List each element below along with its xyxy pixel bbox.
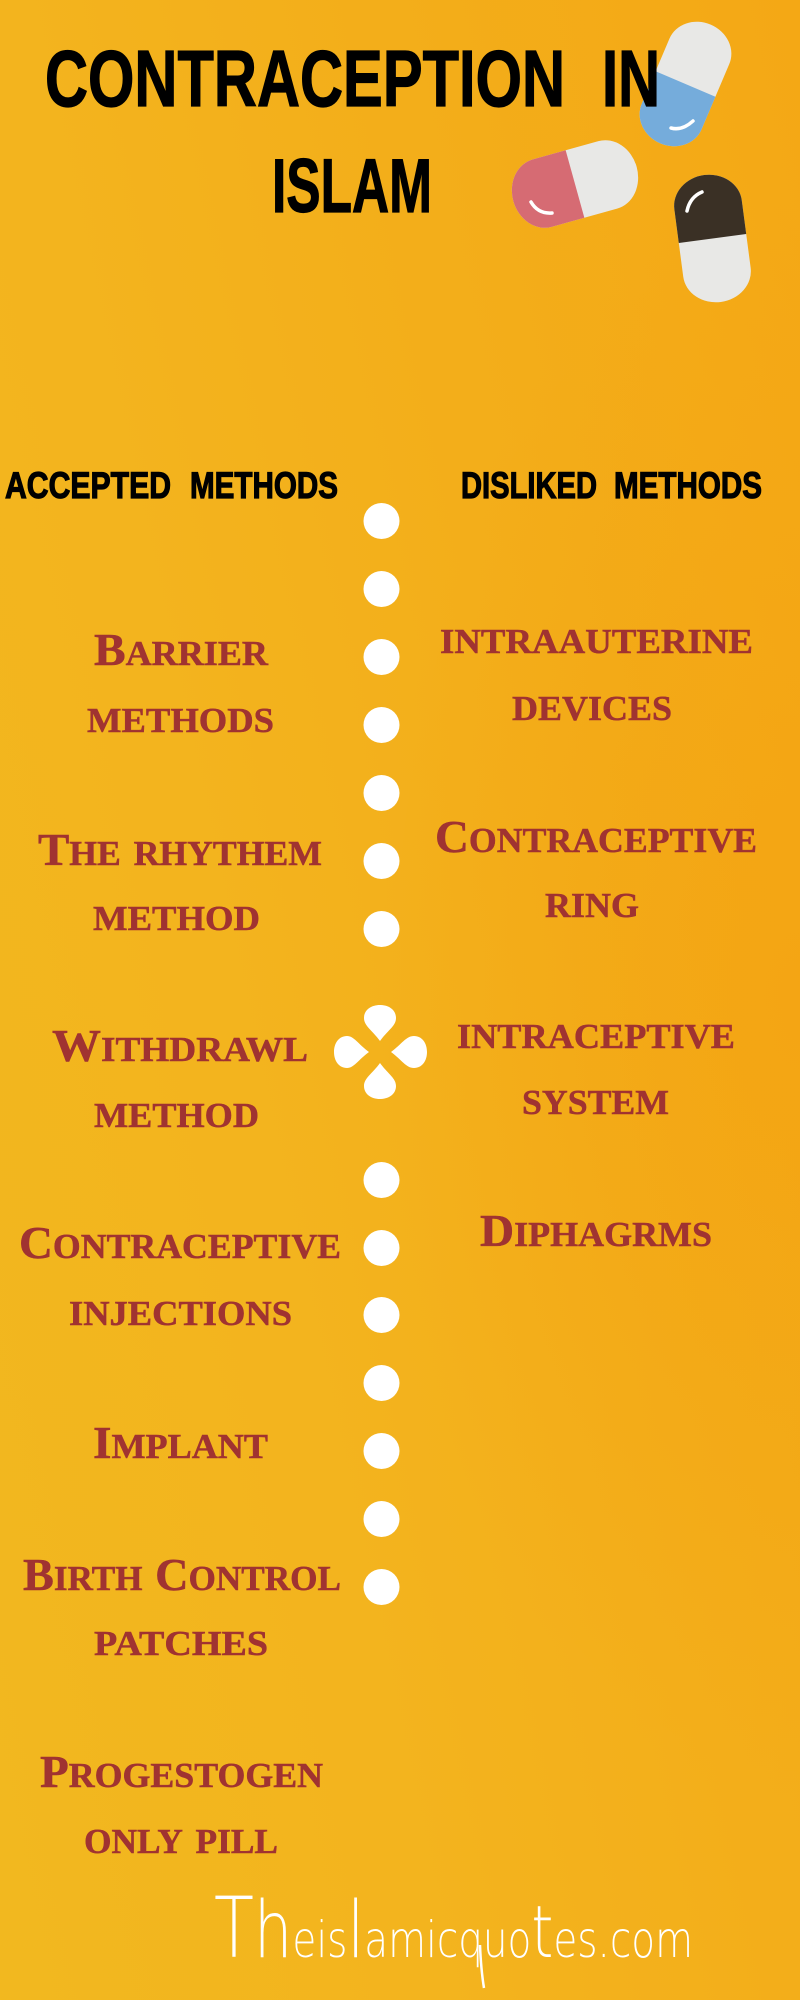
item: contraceptive injections	[19, 1213, 341, 1336]
item: contraceptive ring: Contraceptive	[435, 807, 757, 863]
item: implant: Implant	[93, 1413, 268, 1469]
item: intraauterine devices: intraauterine	[440, 608, 753, 664]
heading: accepted methods	[5, 465, 338, 506]
item: intraceptive system: intraceptive	[457, 1003, 735, 1059]
item: barrier methods: Barrier	[94, 620, 269, 676]
icon: dark and white capsule	[670, 171, 755, 306]
heading: disliked methods: DISLIKED	[461, 465, 597, 506]
heading: accepted methods: METHODS	[190, 465, 338, 506]
item: contraceptive ring	[435, 807, 757, 928]
item: birth control patches: Birth Control	[23, 1545, 341, 1601]
item: birth control patches	[23, 1545, 341, 1666]
icon: pink and white capsule	[504, 133, 646, 235]
item: withdrawl method	[52, 1016, 308, 1138]
item: intraceptive system	[457, 1003, 735, 1125]
item: contraceptive injections: injections	[69, 1280, 292, 1336]
item: birth control patches: patches	[94, 1610, 268, 1666]
item: progestogen only pill: only pill	[84, 1808, 278, 1864]
item: intraceptive system: system	[522, 1069, 669, 1125]
heading: disliked methods: METHODS	[614, 465, 762, 506]
title: CONTRACEPTION	[45, 34, 565, 123]
item: withdrawl method: Withdrawl	[52, 1016, 308, 1072]
item: the rhythem method	[38, 820, 322, 941]
item: the rhythem method: The rhythem	[38, 820, 322, 876]
list: accepted methods	[19, 620, 341, 1864]
item: progestogen only pill: Progestogen	[40, 1742, 323, 1798]
title	[45, 34, 660, 229]
item: intraauterine devices: devices	[512, 675, 672, 731]
item: barrier methods	[87, 620, 274, 743]
item: diphagrms: Diphagrms	[480, 1201, 712, 1257]
icon: four petal ornament	[334, 1005, 427, 1099]
item: contraceptive injections: Contraceptive	[19, 1213, 341, 1269]
item: withdrawl method: method	[94, 1082, 259, 1138]
item: barrier methods: methods	[87, 687, 274, 743]
item: the rhythem method: method	[93, 885, 260, 941]
item: intraauterine devices	[440, 608, 753, 731]
title: IN	[602, 34, 660, 123]
dotted divider: upper	[364, 503, 400, 947]
footer: website: Theislamicquotes.com	[214, 1879, 693, 1977]
icon: blue and white capsule	[630, 12, 741, 156]
heading: disliked methods	[461, 465, 762, 506]
item: progestogen only pill	[40, 1742, 323, 1864]
heading: accepted methods: ACCEPTED	[5, 465, 171, 506]
dotted divider: lower	[364, 1162, 400, 1605]
item: contraceptive ring: ring	[545, 872, 639, 928]
list: disliked methods	[435, 608, 757, 1257]
title: ISLAM	[272, 144, 432, 229]
